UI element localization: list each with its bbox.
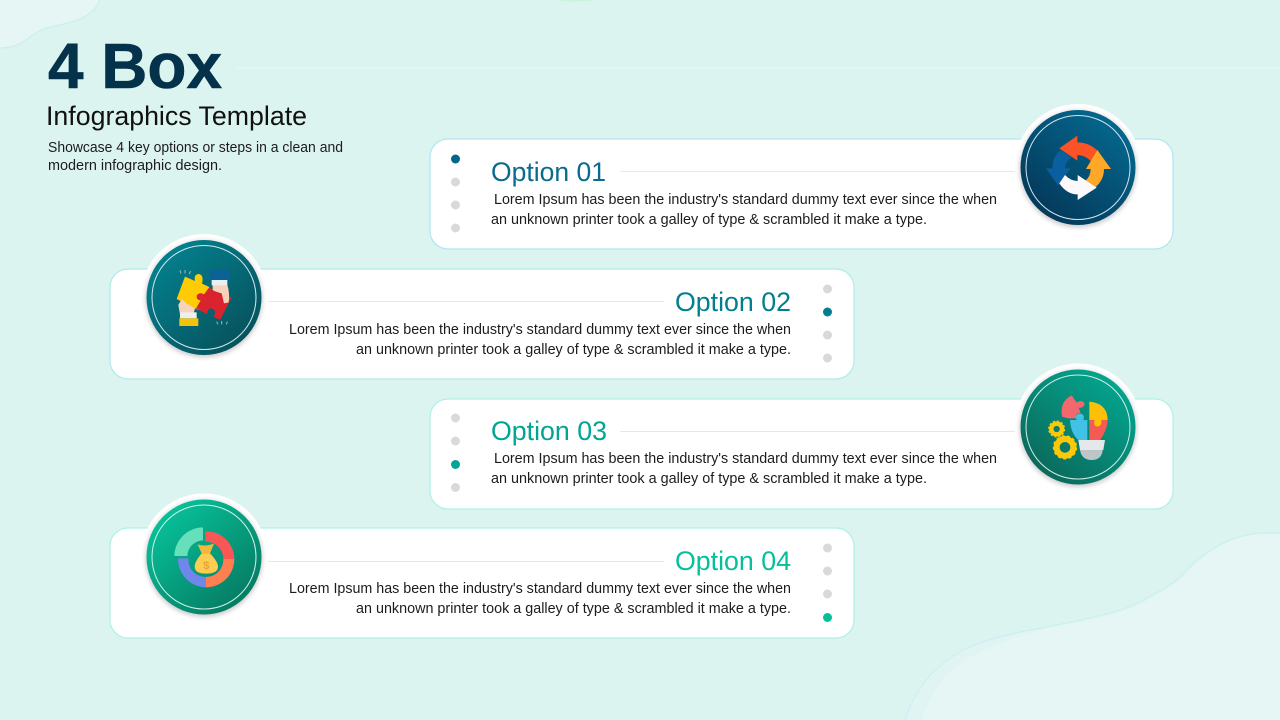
subtitle: Infographics Template (46, 101, 307, 131)
title: 4 Box (48, 30, 222, 102)
badge 02 (140, 234, 268, 361)
body text 02: Lorem Ipsum has been the industry's standard dummy text ever since the when (289, 322, 791, 338)
heading 03: Option 03 (491, 416, 607, 446)
description: Showcase 4 key options or steps in a clean and (48, 140, 343, 156)
icon: puzzle hands (177, 269, 232, 326)
panel: option 03 (430, 364, 1173, 509)
background blob: bottom right fill (922, 534, 1280, 720)
progress dots 02 (823, 284, 832, 362)
badge 01 (1014, 104, 1142, 231)
icon: money bag donut: $ (203, 560, 210, 572)
body text 03: an unknown printer took a galley of type & scrambled it make a type. (491, 471, 927, 487)
icon: cycle arrows (1046, 136, 1111, 200)
heading 01: Option 01 (491, 157, 606, 187)
body text 01: Lorem Ipsum has been the industry's standard dummy text ever since the when (494, 192, 997, 208)
body text 04: Lorem Ipsum has been the industry's standard dummy text ever since the when (289, 581, 791, 597)
card 04 (110, 528, 854, 638)
heading 02: Option 02 (675, 287, 791, 317)
progress dots 03 (451, 414, 460, 492)
panel: option 02 (110, 234, 854, 379)
body text 02: an unknown printer took a galley of type & scrambled it make a type. (356, 342, 791, 358)
badge 03 (1014, 364, 1142, 490)
background accent: top centre (557, 0, 593, 2)
icon: puzzle light bulb (1049, 395, 1108, 460)
header rule (237, 68, 1280, 69)
body text 01 (491, 192, 997, 228)
background blob: bottom right outline (905, 533, 1280, 720)
card 03 (430, 399, 1173, 509)
panel: option 01 (430, 104, 1173, 249)
progress dots 01 (451, 154, 460, 232)
body text 04 (289, 581, 791, 617)
badge 04 (140, 494, 268, 620)
body text 03 (491, 451, 997, 487)
body text 01: an unknown printer took a galley of type & scrambled it make a type. (491, 212, 927, 228)
body text 02 (289, 322, 791, 358)
description (48, 140, 343, 174)
card 01 (430, 139, 1173, 249)
progress dots 04 (823, 544, 832, 622)
heading 04: Option 04 (675, 546, 791, 576)
card 02 (110, 269, 854, 379)
description: modern infographic design. (48, 158, 222, 174)
background blob: top left (0, 0, 100, 48)
body text 04: an unknown printer took a galley of type & scrambled it make a type. (356, 601, 791, 617)
body text 03: Lorem Ipsum has been the industry's standard dummy text ever since the when (494, 451, 997, 467)
panel: option 04 (110, 494, 854, 638)
